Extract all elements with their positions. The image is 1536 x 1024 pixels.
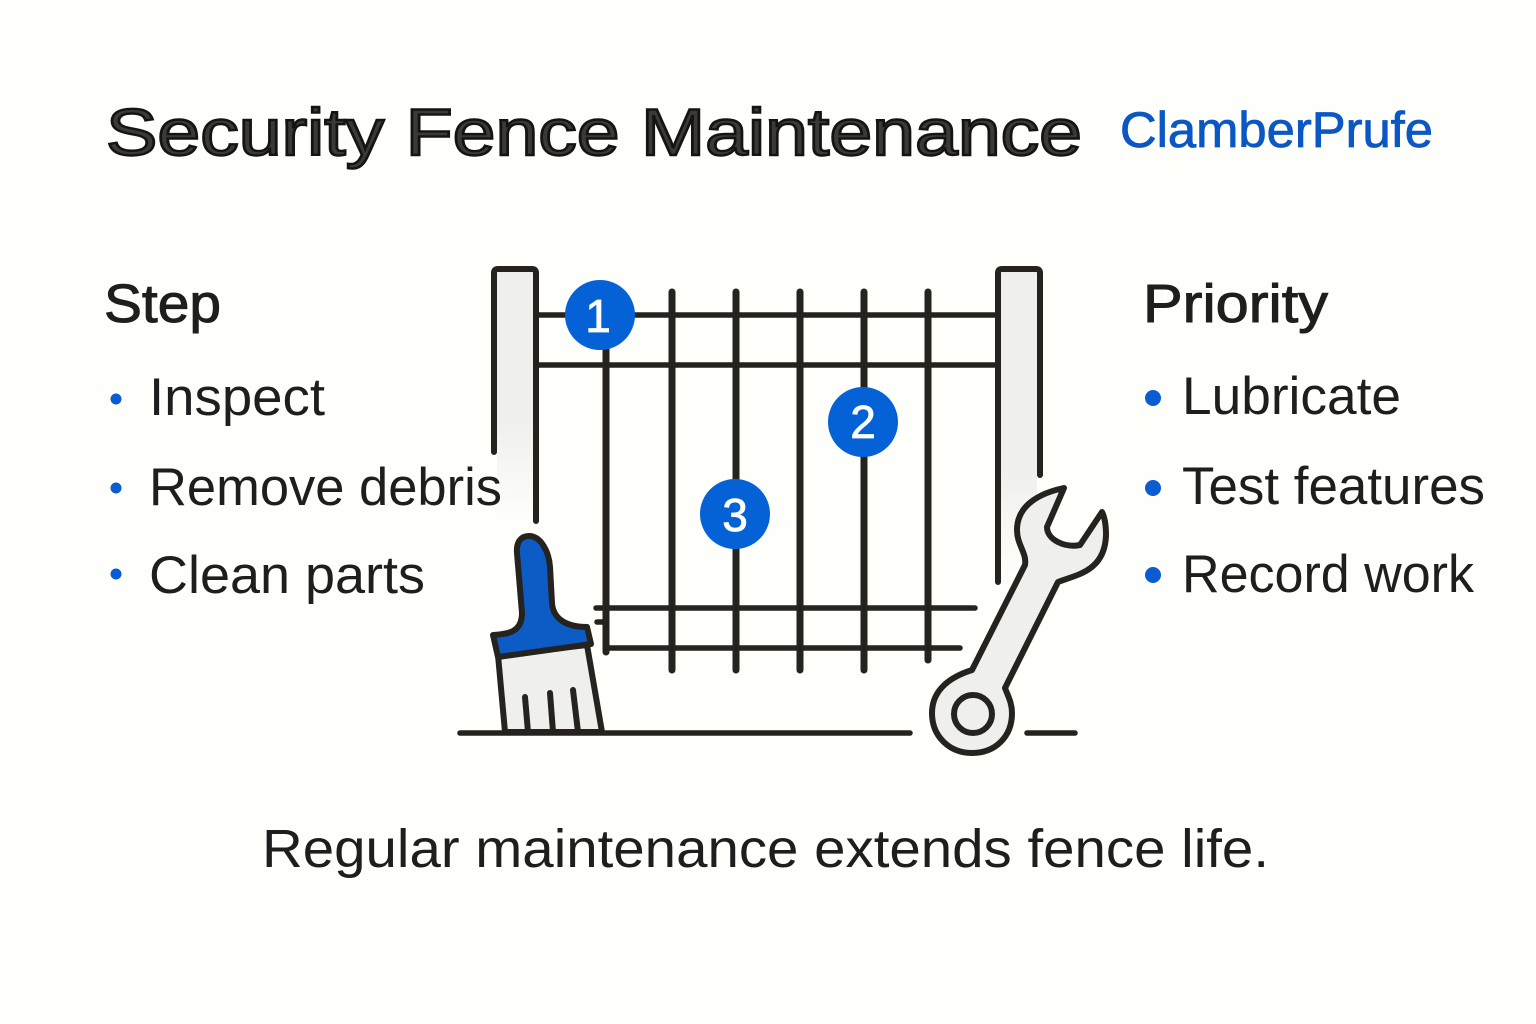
list item: record work: Record work: [1182, 545, 1474, 604]
fence pickets: [606, 292, 928, 670]
panel: step list: [104, 274, 502, 605]
fence illustration: [460, 269, 1075, 733]
badge 1: [565, 280, 635, 350]
fence rails: [536, 315, 998, 648]
brush handle: [493, 536, 591, 657]
badge 3: [700, 479, 770, 549]
list item: test features: Test features: [1182, 457, 1485, 516]
list item: lubricate: Lubricate: [1182, 367, 1401, 426]
list item: clean parts: Clean parts: [149, 546, 425, 605]
bristle lines: [525, 690, 578, 732]
badge 2: [828, 387, 898, 457]
right fence post: [998, 269, 1040, 582]
badge 1: 1: [585, 290, 611, 342]
list item: inspect: Inspect: [149, 368, 325, 427]
icon: wrench: [932, 488, 1106, 753]
list item: remove debris: Remove debris: [149, 458, 502, 517]
badge 2: 2: [850, 396, 876, 448]
title: Security Fence Maintenance: [106, 95, 1082, 169]
wrench body: [932, 488, 1106, 753]
badge 3: 3: [722, 489, 748, 541]
heading: priority: Priority: [1143, 274, 1328, 334]
footer caption: Regular maintenance extends fence life.: [262, 819, 1269, 879]
wrench ring: [954, 695, 992, 733]
icon: paint brush: [493, 536, 602, 732]
left fence post: [494, 269, 536, 521]
ground line: [460, 730, 1075, 736]
heading: step: Step: [104, 274, 221, 334]
brush bristles: [498, 645, 602, 732]
brand name: ClamberPrufe: [1120, 102, 1433, 158]
panel: priority list: [1143, 274, 1485, 604]
